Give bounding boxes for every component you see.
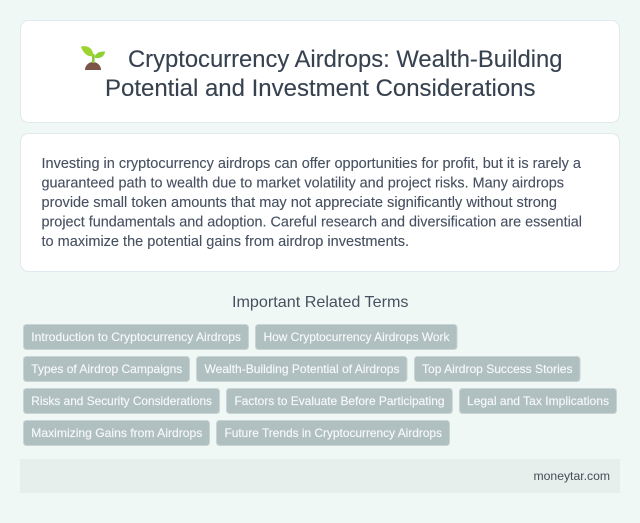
title: Potential and Investment Considerations: [105, 75, 536, 102]
text block: summary: provide small token amounts that may not appreciate significantly without strong: [42, 194, 557, 211]
tag: wealth-building potential: [196, 356, 407, 382]
footer source: moneytar.com: [534, 469, 610, 483]
footer bar: [20, 459, 620, 493]
text block: summary: guaranteed path to wealth due to market volatility and project risks. Many airdrops: [42, 174, 564, 192]
panel: summary paragraph: [20, 134, 620, 272]
tag: how airdrops work: How Cryptocurrency Airdrops Work: [264, 330, 450, 344]
heading: related terms: Important Related Terms: [232, 294, 408, 311]
text block: summary: Investing in cryptocurrency airdrops can offer opportunities for profit, but it is rarely a: [42, 155, 582, 172]
tag: risks and security: [24, 388, 220, 414]
tag: types of campaigns: [24, 356, 190, 382]
tag: types of campaigns: Types of Airdrop Campaigns: [31, 362, 182, 376]
tag: factors to evaluate: Factors to Evaluate Before Participating: [234, 394, 444, 408]
tag: legal and tax: [460, 388, 616, 414]
tag: maximizing gains: Maximizing Gains from Airdrops: [31, 426, 202, 440]
title: [105, 46, 562, 102]
tag: factors to evaluate: [226, 388, 452, 414]
tag: future trends: Future Trends in Cryptocurrency Airdrops: [224, 426, 442, 440]
tag: success stories: [414, 356, 580, 382]
text block: summary: project fundamentals and adoption. Careful research and diversification are essential: [42, 214, 582, 230]
icon: sprout: [81, 46, 105, 70]
tag: legal and tax: Legal and Tax Implications: [467, 394, 609, 408]
tag: introduction: Introduction to Cryptocurrency Airdrops: [31, 330, 241, 344]
tag: risks and security: Risks and Security Considerations: [31, 394, 212, 408]
tag group: related terms: [24, 324, 616, 446]
tag: success stories: Top Airdrop Success Stories: [422, 362, 572, 376]
tag: maximizing gains: [24, 420, 210, 446]
tag: introduction: [24, 324, 248, 350]
tag: how airdrops work: [256, 324, 457, 350]
text block: summary: to maximize the potential gains from airdrop investments.: [42, 233, 409, 250]
tag: future trends: [216, 420, 450, 446]
title: Cryptocurrency Airdrops: Wealth-Building: [128, 46, 562, 73]
panel: title header: [20, 20, 620, 122]
text block: summary: [42, 155, 582, 250]
tag: wealth-building potential: Wealth-Building Potential of Airdrops: [204, 362, 400, 376]
